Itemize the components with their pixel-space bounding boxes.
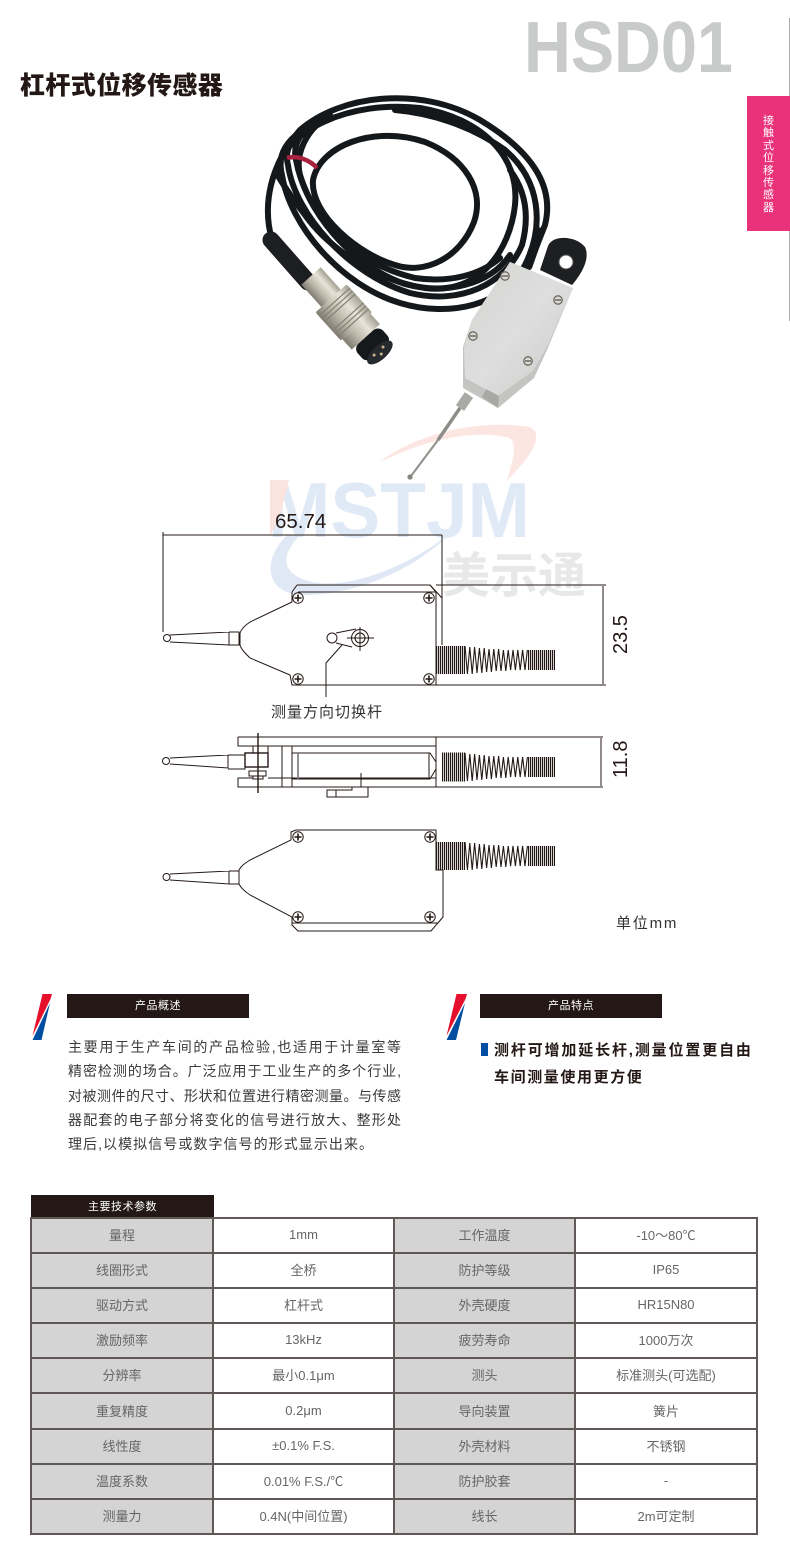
heading: overview <box>67 994 249 1018</box>
row: drive / hardness <box>32 1289 695 1322</box>
row: coil type / protection class: 线圈形式 <box>96 1263 148 1278</box>
section icon: features <box>446 994 467 1040</box>
feature line 1: 测杆可增加延长杆,测量位置更自由 <box>494 1042 753 1059</box>
product photo <box>262 95 587 480</box>
specification table <box>30 1217 758 1535</box>
row: force / cable length: 0.4N(中间位置) <box>259 1509 348 1524</box>
row: temperature coefficient / sleeve <box>32 1465 668 1498</box>
overview paragraph: 器配套的电子部分将变化的信号进行放大、整形处 <box>68 1112 401 1128</box>
row: linearity / housing material: ±0.1% F.S. <box>272 1438 335 1453</box>
row: resolution / tip: 分辨率 <box>102 1368 142 1383</box>
dimension 23.5: 23.5 <box>610 615 632 654</box>
row: coil type / protection class: 全桥 <box>290 1263 316 1278</box>
connector <box>295 262 400 372</box>
dimension 65.74: 65.74 <box>275 510 326 533</box>
features list <box>481 1042 753 1086</box>
row: repeatability / guide: 簧片 <box>653 1404 679 1419</box>
row: range / working temperature <box>32 1219 716 1533</box>
dimension 23.5 <box>436 585 632 685</box>
screws <box>293 832 435 922</box>
side tab: 移 <box>763 165 774 177</box>
row: resolution / tip: 最小0.1μm <box>272 1368 335 1383</box>
probe and clevis <box>162 733 268 793</box>
row: force / cable length: 2m可定制 <box>637 1509 695 1524</box>
row: repeatability / guide: 导向装置 <box>458 1404 510 1419</box>
row: range / working temperature: -10～80℃ <box>636 1228 696 1243</box>
row: repeatability / guide: 重复精度 <box>96 1404 148 1419</box>
cable spring <box>436 646 555 674</box>
row: force / cable length: 线长 <box>471 1509 498 1524</box>
bullet <box>481 1043 488 1056</box>
probe <box>164 632 239 645</box>
heading: overview: 产品概述 <box>135 1000 181 1012</box>
row: temperature coefficient / sleeve: 温度系数 <box>96 1474 148 1489</box>
cable spring <box>436 842 555 870</box>
section icon: overview <box>32 994 52 1040</box>
side rule <box>789 18 790 321</box>
row: repeatability / guide: 0.2μm <box>285 1403 322 1418</box>
overview paragraph: 理后,以模拟信号或数字信号的形式显示出来。 <box>68 1136 373 1152</box>
row: force / cable length: 测量力 <box>102 1509 142 1524</box>
screws <box>293 593 434 684</box>
side tab: 器 <box>763 202 774 214</box>
switch lever <box>326 627 374 697</box>
technical drawing: top view <box>162 510 632 720</box>
side tab: 触 <box>763 127 774 139</box>
probe <box>163 871 239 884</box>
row: linearity / housing material: 外壳材料 <box>458 1439 510 1454</box>
row: resolution / tip: 测头 <box>471 1368 498 1383</box>
side tab: 位 <box>763 152 774 164</box>
side tab: 感 <box>763 189 774 201</box>
housing outline <box>239 830 443 931</box>
row: excitation / fatigue life: 1000万次 <box>639 1333 693 1348</box>
row: range / working temperature: 量程 <box>109 1228 135 1243</box>
row: temperature coefficient / sleeve: 防护胶套 <box>458 1474 510 1489</box>
row: drive / hardness: 外壳硬度 <box>458 1298 510 1313</box>
dimension 11.8: 11.8 <box>610 741 632 778</box>
watermark: MSTJM logo: 美示通 <box>442 536 586 606</box>
housing outline <box>240 585 442 685</box>
cable sleeve <box>271 240 308 282</box>
row: excitation / fatigue life: 激励频率 <box>96 1333 148 1348</box>
overview paragraph: 对被测件的尺寸、形状和位置进行精密测量。与传感 <box>68 1088 401 1104</box>
watermark: MSTJM logo: MSTJM <box>268 466 530 554</box>
heading: features: 产品特点 <box>548 1000 594 1012</box>
table heading: 主要技术参数 <box>88 1201 157 1213</box>
feature line 2: 车间测量使用更方便 <box>494 1069 643 1086</box>
side tab: 式 <box>763 140 774 152</box>
dimension 11.8 <box>436 737 632 787</box>
row: drive / hardness: 驱动方式 <box>96 1298 148 1313</box>
title: 杠杆式位移传感器 <box>20 72 223 100</box>
row: excitation / fatigue life: 疲劳寿命 <box>458 1333 510 1348</box>
row: range / working temperature: 1mm <box>289 1227 318 1242</box>
unit label: 单位mm <box>616 915 678 932</box>
row: force / cable length <box>32 1500 695 1533</box>
red wire tie <box>287 157 317 168</box>
row: temperature coefficient / sleeve: - <box>664 1473 668 1488</box>
heading: features <box>480 994 662 1018</box>
side tab: 接 <box>763 115 774 127</box>
row: coil type / protection class: 防护等级 <box>458 1263 510 1278</box>
row: temperature coefficient / sleeve: 0.01% F.S./℃ <box>264 1474 343 1489</box>
row: drive / hardness: 杠杆式 <box>284 1298 323 1313</box>
probe <box>407 395 469 480</box>
row: resolution / tip <box>32 1359 716 1392</box>
technical drawing: bottom view <box>162 830 555 932</box>
table heading <box>31 1195 214 1218</box>
row: repeatability / guide <box>32 1394 679 1428</box>
technical drawing: side view <box>162 733 632 798</box>
overview paragraph: 主要用于生产车间的产品检验,也适用于计量室等 <box>68 1039 401 1055</box>
sensor body <box>463 238 587 408</box>
row: drive / hardness: HR15N80 <box>637 1297 695 1312</box>
frame <box>238 737 436 787</box>
row: coil type / protection class <box>32 1254 679 1287</box>
row: linearity / housing material <box>32 1430 686 1463</box>
dimension 65.74 <box>163 510 442 645</box>
overview paragraph: 精密检测的场合。广泛应用于工业生产的多个行业, <box>68 1063 401 1079</box>
row: linearity / housing material: 线性度 <box>102 1439 142 1454</box>
row: coil type / protection class: IP65 <box>653 1262 679 1277</box>
side tab: 传 <box>763 177 774 189</box>
cable spring <box>442 753 555 781</box>
watermark: MSTJM logo <box>268 424 586 606</box>
row: excitation / fatigue life: 13kHz <box>285 1332 322 1347</box>
lever <box>327 773 368 797</box>
side tab <box>747 96 790 231</box>
overview paragraph <box>68 1039 401 1152</box>
row: linearity / housing material: 不锈钢 <box>646 1439 686 1454</box>
cable coil <box>268 98 547 309</box>
row: range / working temperature: 工作温度 <box>458 1228 510 1243</box>
row: resolution / tip: 标准测头(可选配) <box>616 1368 716 1383</box>
row: excitation / fatigue life <box>32 1324 693 1357</box>
